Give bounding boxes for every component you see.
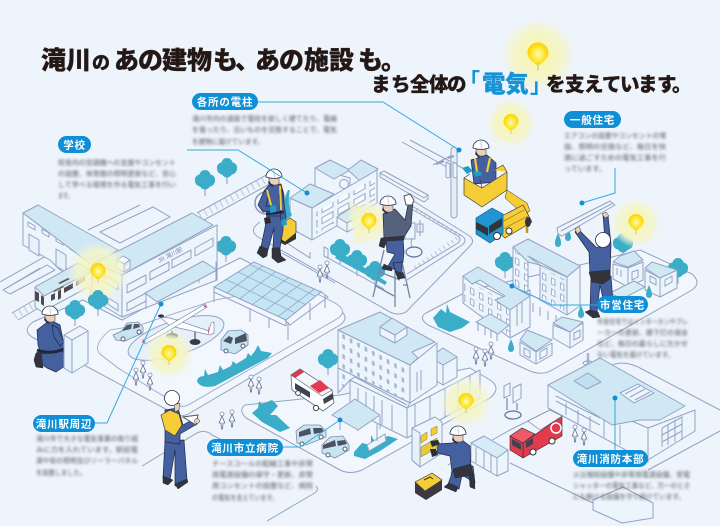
ladder and worker on ladder — [373, 194, 414, 307]
leader lines — [95, 102, 618, 450]
school tower — [315, 168, 350, 215]
box and worker: lower left — [34, 290, 108, 373]
label: 滝川駅周辺: 滝川駅周辺 — [36, 418, 92, 430]
trees at school — [195, 158, 292, 262]
text: 学校: の設置、体育館の照明更新など、安心 — [58, 169, 176, 178]
title line 2: 」 — [530, 75, 551, 98]
worker: at electrical panel — [412, 417, 475, 492]
map pins and glows — [90, 18, 661, 428]
text: 市営住宅: 市営住宅ではインターホンやブレ — [597, 317, 688, 326]
ambulance — [291, 369, 334, 411]
outlet & coil — [405, 223, 415, 239]
text: 滝川消防本部: にも動ける設備を守り続けています。 — [573, 492, 685, 501]
toolboxes — [415, 473, 442, 500]
text: 一般住宅: 設、照明の交換など、毎日を快 — [564, 142, 666, 151]
label: 一般住宅 — [564, 111, 621, 128]
utility pole and wires — [402, 140, 470, 218]
text: 滝川市立病院 — [212, 459, 313, 502]
text: 市営住宅: ない電気を届けています。 — [597, 350, 674, 359]
label: 学校: 学校 — [63, 138, 86, 152]
title line 1: の — [92, 53, 110, 73]
glow: station bulb — [67, 241, 129, 303]
label: 滝川市立病院: 滝川市立病院 — [211, 442, 279, 454]
text: 市営住宅: など、毎日の暮らしに欠かせ — [597, 339, 688, 348]
text: 滝川消防本部: 火災報知設備や非常用電源設備、受電 — [573, 470, 690, 479]
worker: pole harness with toolbox — [255, 169, 296, 263]
ground roads and block outlines — [0, 173, 720, 521]
text: 滝川市立病院: の電気を支えています。 — [212, 493, 278, 502]
school hedge — [324, 247, 328, 258]
bucket truck with worker — [462, 140, 532, 243]
glow: school bulb — [347, 200, 391, 244]
text: 市営住宅 — [597, 317, 688, 359]
people silhouettes — [133, 261, 587, 445]
title line 2: 電気 — [482, 70, 528, 97]
fire station — [548, 353, 695, 523]
station canopy — [146, 262, 216, 309]
worker: holding beam — [555, 201, 615, 318]
label: 各所の電柱 — [192, 93, 258, 110]
label: 市営住宅: 市営住宅 — [600, 298, 645, 312]
school main — [312, 170, 377, 240]
school canopy — [337, 217, 347, 232]
text: 一般住宅: エアコンの設置やコンセントの増 — [564, 131, 666, 140]
title — [41, 47, 406, 75]
text: 滝川市立病院: 用電源設備の保守・更新、非常 — [212, 470, 313, 479]
train — [35, 263, 92, 312]
text: 一般住宅: 適に過ごすための電気工事を行 — [564, 153, 666, 162]
text: 学校: して学べる環境を作る電気工事を行い — [58, 180, 176, 189]
text: 滝川駅周辺: 滝川市で大きな電気事業の取り組 — [36, 434, 138, 443]
label: 学校 — [58, 136, 91, 153]
text: 滝川市立病院: 用コンセントの設置など、病院 — [212, 481, 313, 490]
apartments — [463, 239, 580, 341]
plane monument — [123, 304, 229, 370]
title line 2: 「 — [459, 70, 480, 93]
text: 滝川駅周辺: を設置しました。 — [36, 469, 86, 477]
title line 2: まち全体の — [371, 74, 467, 96]
label: 滝川駅周辺 — [33, 415, 95, 432]
text: 学校 — [58, 158, 176, 200]
railway tracks — [12, 173, 277, 320]
label: 市営住宅 — [597, 296, 648, 313]
text: 滝川駅周辺 — [36, 434, 138, 477]
text: 各所の電柱 — [192, 114, 337, 146]
text: 滝川市立病院: ナースコールの配線工事や非常 — [212, 459, 313, 468]
text: 一般住宅: っています。 — [564, 165, 606, 173]
station: JR 滝川駅 — [156, 245, 184, 265]
fire truck — [510, 410, 562, 458]
cars and van — [113, 322, 248, 354]
label: 一般住宅: 一般住宅 — [570, 114, 615, 126]
hospital cars — [296, 425, 349, 458]
station main block — [90, 263, 122, 317]
label: 滝川市立病院 — [207, 439, 283, 456]
title line 2: を支えています。 — [546, 73, 692, 96]
label: 滝川消防本部: 滝川消防本部 — [577, 452, 644, 466]
title line 1: あの建物も、あの施設も。 — [114, 47, 406, 75]
text: 滝川駅周辺: 源や街の照明及びソーラーパネル — [36, 456, 138, 465]
text: 滝川消防本部: シャッターの電気工事など、万一のとき — [573, 481, 690, 490]
hospital — [332, 312, 480, 441]
houses — [508, 228, 688, 364]
worker: standing with clipboard — [161, 390, 200, 489]
label: 各所の電柱: 各所の電柱 — [197, 96, 253, 108]
solar panels — [214, 262, 338, 375]
utility cabinet — [471, 436, 508, 476]
beam — [380, 171, 428, 198]
station — [23, 205, 217, 317]
title line 1: 滝川 — [41, 47, 91, 75]
label: 滝川消防本部 — [573, 450, 648, 467]
hedges — [197, 304, 470, 459]
text: 学校: 校舎内の空調機への支援やコンセント — [58, 158, 176, 167]
text: 各所の電柱: を建物に届けています。 — [192, 137, 264, 146]
text: 一般住宅 — [564, 131, 666, 173]
text: 各所の電柱: を張ったり、古いものを交換することで、電気 — [192, 125, 337, 134]
outlet sign and coil — [504, 383, 521, 419]
school block — [253, 160, 473, 314]
text: 学校: ます。 — [58, 192, 73, 200]
text: 各所の電柱: 滝川市内の道路で電柱を新しく建てたり、電線 — [192, 114, 337, 123]
text: 滝川駅周辺: みに力を入れています。駅前電 — [36, 445, 138, 454]
text: 滝川消防本部 — [573, 470, 690, 501]
text: 市営住宅: ーカーの更新、廊下灯の保全 — [597, 328, 688, 337]
